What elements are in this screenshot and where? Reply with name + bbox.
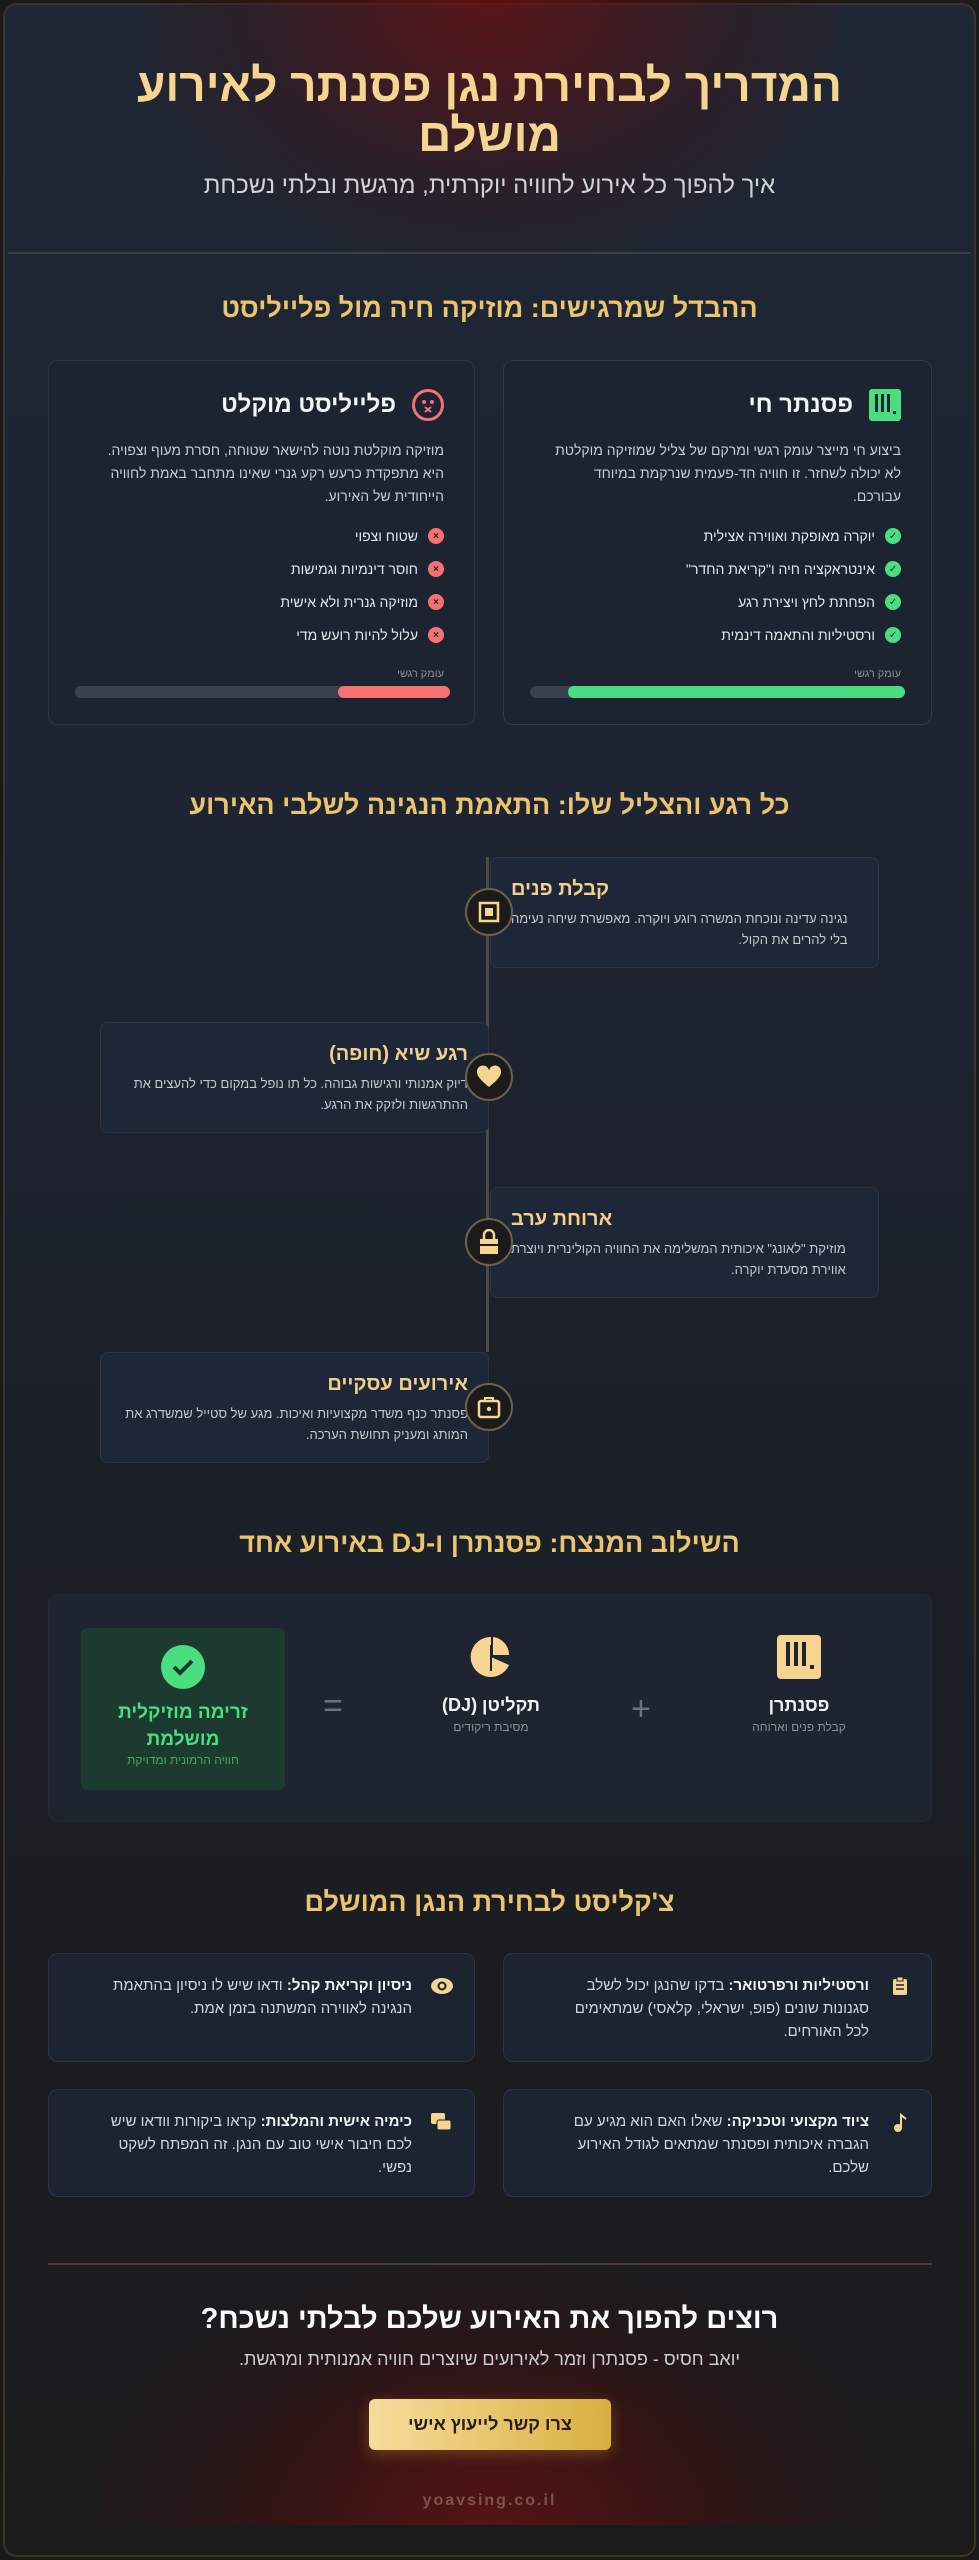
- timeline item: chuppah: רגע שיא (חופה): [329, 1043, 468, 1065]
- timeline item: dinner: ארוחת ערב: [511, 1208, 612, 1230]
- pianist: [752, 1635, 846, 1734]
- timeline line: [486, 857, 489, 1352]
- checklist: versatility: [503, 1953, 932, 2062]
- DJ: [442, 1637, 540, 1734]
- DJ: מסיבת ריקודים: [453, 1720, 529, 1734]
- heading: checklist: צ'קליסט לבחירת הנגן המושלם: [305, 1887, 674, 1917]
- panel: playlist: ×: [433, 564, 439, 574]
- plus: +: [631, 1690, 651, 1728]
- panel: playlist: [48, 360, 475, 725]
- icon: eye: [431, 1978, 453, 1994]
- panel: live piano: [503, 360, 932, 725]
- timeline item: business: המותג ומעניק תחושת הערכה.: [306, 1427, 468, 1442]
- panel: playlist: עלול להיות רועש מדי: [296, 627, 418, 643]
- result box: מושלמת: [147, 1729, 219, 1750]
- title: [137, 59, 842, 161]
- timeline item: dinner: אווירת מסעדת יוקרה.: [731, 1262, 846, 1277]
- CTA subtext: יואב חסיס - פסנתרן וזמר לאירועים שיוצרים חוויה אמנותית ומרגשת.: [239, 2349, 740, 2369]
- timeline item: chuppah: דיוק אמנותי ורגישות גבוהה. כל תו נופל במקום כדי להעצים את: [134, 1076, 468, 1091]
- equals: =: [323, 1687, 343, 1725]
- timeline item: reception: [490, 857, 879, 968]
- card title: פלייליסט מוקלט: [221, 391, 396, 418]
- subtitle: איך להפוך כל אירוע לחוויה יוקרתית, מרגשת ובלתי נשכחת: [204, 172, 775, 199]
- timeline item: dinner: [490, 1187, 879, 1298]
- header glow: [140, 0, 840, 260]
- CTA heading: רוצים להפוך את האירוע שלכם לבלתי נשכח?: [201, 2303, 778, 2335]
- panel: live piano: הפחתת לחץ ויצירת רגע: [738, 594, 875, 610]
- pianist: פסנתרן: [769, 1695, 829, 1715]
- panel: live piano: ורסטיליות והתאמה דינמית: [721, 627, 875, 643]
- timeline item: business: פסנתר כנף משדר מקצועיות ואיכות. מגע של סטייל שמשדרג את: [125, 1406, 468, 1421]
- CTA button: צרו קשר לייעוץ אישי: [408, 2414, 572, 2434]
- footer glow: [100, 2265, 880, 2525]
- timeline item: dinner: מוזיקת "לאונג" איכותית המשלימה את החוויה הקולינרית ויוצרת: [511, 1241, 846, 1256]
- timeline item: reception: קבלת פנים: [511, 878, 609, 900]
- list: שטוח וצפוי: [355, 528, 418, 544]
- icon: dinner: [465, 1218, 513, 1266]
- panel: playlist: חוסר דינמיות וגמישות: [291, 561, 418, 577]
- checklist: equipment: ציוד מקצועי וטכניקה: שאלו האם הוא מגיע עם הגברה איכותית ופסנתר שמתאים לגודל האירוע שלכם.: [574, 2113, 869, 2176]
- checklist: chemistry: [48, 2089, 475, 2197]
- list: יוקרה מאופקת ואווירה אצילית: [704, 528, 875, 544]
- CTA button: [369, 2399, 611, 2450]
- card title: פסנתר חי: [748, 391, 853, 418]
- panel: playlist: ×: [433, 596, 439, 608]
- panel: live piano: ✓: [889, 596, 897, 608]
- checklist: versatility: ורסטיליות ורפרטואר: בדקו שהנגן יכול לשלב סגנונות שונים (פופ, ישראלי, קלאסי) שמתאימים לכל האורחים.: [575, 1977, 869, 2040]
- list: ×: [433, 530, 439, 542]
- bar: emotional depth: עומק רגשי: [397, 668, 444, 680]
- icon: music: [894, 2113, 907, 2132]
- description: ביצוע חי מייצר עומק רגשי ומרקם של צליל שמוזיקה מוקלטת לא יכולה לשחזר. זו חוויה חד-פעמית שנרקמת במיוחד עבורכם.: [555, 442, 901, 504]
- panel: live piano: ✓: [889, 564, 897, 574]
- timeline item: chuppah: ההתרגשות ולזקק את הרגע.: [320, 1097, 468, 1112]
- heading: comparison: ההבדל שמרגישים: מוזיקה חיה מול פלייליסט: [221, 293, 758, 323]
- result box: חוויה הרמונית ומדויקת: [127, 1753, 239, 1767]
- pianist: קבלת פנים וארוחה: [752, 1720, 846, 1734]
- timeline item: reception: נגינה עדינה ונוכחת המשרה רוגע ויוקרה. מאפשרת שיחה נעימה: [511, 911, 848, 926]
- title: המדריך לבחירת נגן פסנתר לאירוע: [137, 59, 842, 111]
- timeline item: business: [100, 1352, 489, 1463]
- icon: piano: [777, 1635, 821, 1679]
- result box: זרימה מוזיקלית: [118, 1702, 248, 1723]
- bar: emotional depth: עומק רגשי: [854, 668, 901, 680]
- icon: piano green: [869, 389, 901, 421]
- checklist: equipment: [503, 2089, 932, 2197]
- icon: clipboard: [893, 1978, 907, 1995]
- icon: check: [161, 1645, 205, 1689]
- icon: briefcase: [465, 1383, 513, 1431]
- description: מוזיקה מוקלטת נוטה להישאר שטוחה, חסרת מעוף וצפויה. היא מתפקדת כרעש רקע גנרי שאינו מתחבר באמת לחוויה הייחודית של האירוע.: [108, 442, 444, 504]
- checklist: chemistry: כימיה אישית והמלצות: קראו ביקורות וודאו שיש לכם חיבור אישי טוב עם הנגן. זה המפתח לשקט נפשי.: [111, 2113, 412, 2176]
- heading: timeline: כל רגע והצליל שלו: התאמת הנגינה לשלבי האירוע: [189, 790, 790, 820]
- result box: [81, 1628, 285, 1790]
- heading: combination: השילוב המנצח: פסנתרן ו-DJ באירוע אחד: [239, 1528, 740, 1558]
- website: yoavsing.co.il: [423, 2492, 556, 2509]
- timeline item: business: אירועים עסקיים: [327, 1373, 468, 1395]
- DJ: תקליטן (DJ): [442, 1695, 540, 1715]
- icon: sad face: [412, 389, 444, 421]
- timeline item: reception: בלי להרים את הקול.: [738, 932, 848, 947]
- panel: live piano: ✓: [889, 630, 897, 640]
- panel: live piano: אינטראקציה חיה ו"קריאת החדר": [686, 561, 875, 577]
- panel: playlist: מוזיקה גנרית ולא אישית: [280, 594, 418, 610]
- timeline item: chuppah: [100, 1022, 489, 1133]
- icon: chat: [431, 2113, 450, 2130]
- icon: record: [470, 1637, 509, 1677]
- panel: playlist: ×: [433, 630, 439, 640]
- title: מושלם: [418, 109, 561, 161]
- panel: combination: [48, 1594, 932, 1822]
- list: ✓: [889, 530, 897, 542]
- checklist: experience: ניסיון וקריאת קהל: ודאו שיש לו ניסיון בהתאמת הנגינה לאווירה המשתנה בזמן אמת.: [113, 1977, 412, 2017]
- checklist: experience: [48, 1953, 475, 2062]
- icon: heart: [465, 1053, 513, 1101]
- icon: reception: [465, 888, 513, 936]
